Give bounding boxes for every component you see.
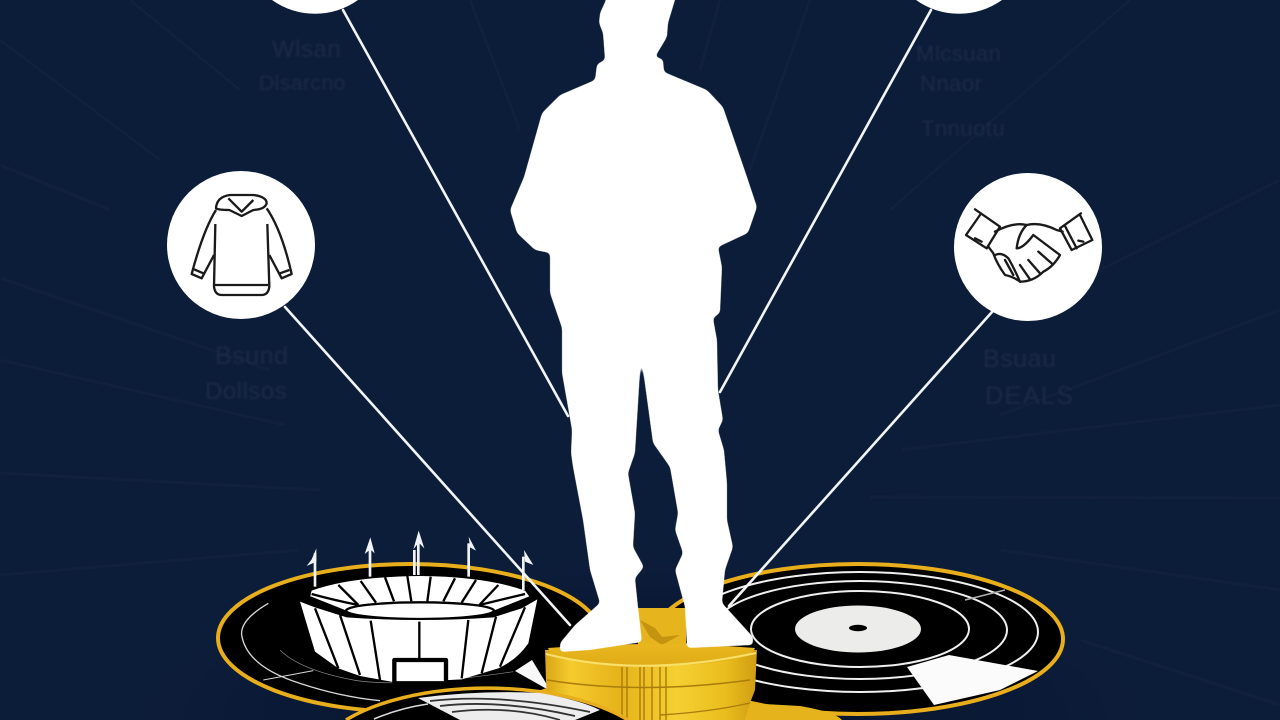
ghost label: top right: [916, 41, 1005, 141]
ghost label: brand merch: Dollsos: [205, 378, 287, 405]
ghost label: brand merch: Bsund: [215, 342, 288, 370]
main coin body: [545, 650, 757, 720]
silhouette of artist: [510, 0, 757, 652]
connector line: merch to stadium: [285, 307, 570, 625]
ghost label: brand deals: DEALS: [985, 382, 1074, 410]
stadium icon: [300, 576, 537, 683]
icon: handshake: [966, 209, 1092, 282]
ghost label: brand deals: [983, 345, 1074, 410]
connector line: deals to record: [729, 312, 992, 606]
ghost label: top right: Mlcsuan: [916, 41, 1001, 66]
icon: hoodie: [192, 195, 292, 295]
connector lines: [343, 10, 931, 416]
upper coin behind feet: [638, 608, 686, 654]
lower right coin: [745, 703, 842, 720]
coin band lines: [547, 667, 750, 720]
vinyl record with stadium: [218, 531, 602, 712]
white wedge: [907, 655, 1038, 705]
spindle hole: [849, 625, 867, 631]
record grooves: [242, 603, 513, 701]
ghost label: top left: Wlsan: [272, 36, 341, 63]
grooves: [682, 572, 1038, 692]
icon circle: hoodie: [167, 171, 315, 319]
record label: [795, 606, 921, 652]
icon circle: top right: [916, 0, 1002, 14]
ghost label: brand deals: Bsuau: [983, 345, 1056, 373]
ghost label: top left: [259, 36, 346, 95]
ghost label: top right: Tnnuotu: [921, 116, 1005, 141]
silver grooves: [418, 692, 600, 720]
coin top surface: [548, 644, 755, 666]
ghost label: top left: Dlsarcno: [259, 72, 346, 95]
ghost label: top right: Nnaor: [920, 71, 982, 96]
upward arrows: [307, 531, 533, 590]
icon circle: top left: [272, 0, 358, 14]
icon circle: handshake: [954, 173, 1102, 321]
vinyl record right: [653, 564, 1063, 714]
white wedge: [515, 660, 549, 688]
gold coin stack: [545, 608, 842, 720]
ghost label: brand merch: [205, 342, 288, 405]
vinyl record bottom: [346, 688, 628, 720]
